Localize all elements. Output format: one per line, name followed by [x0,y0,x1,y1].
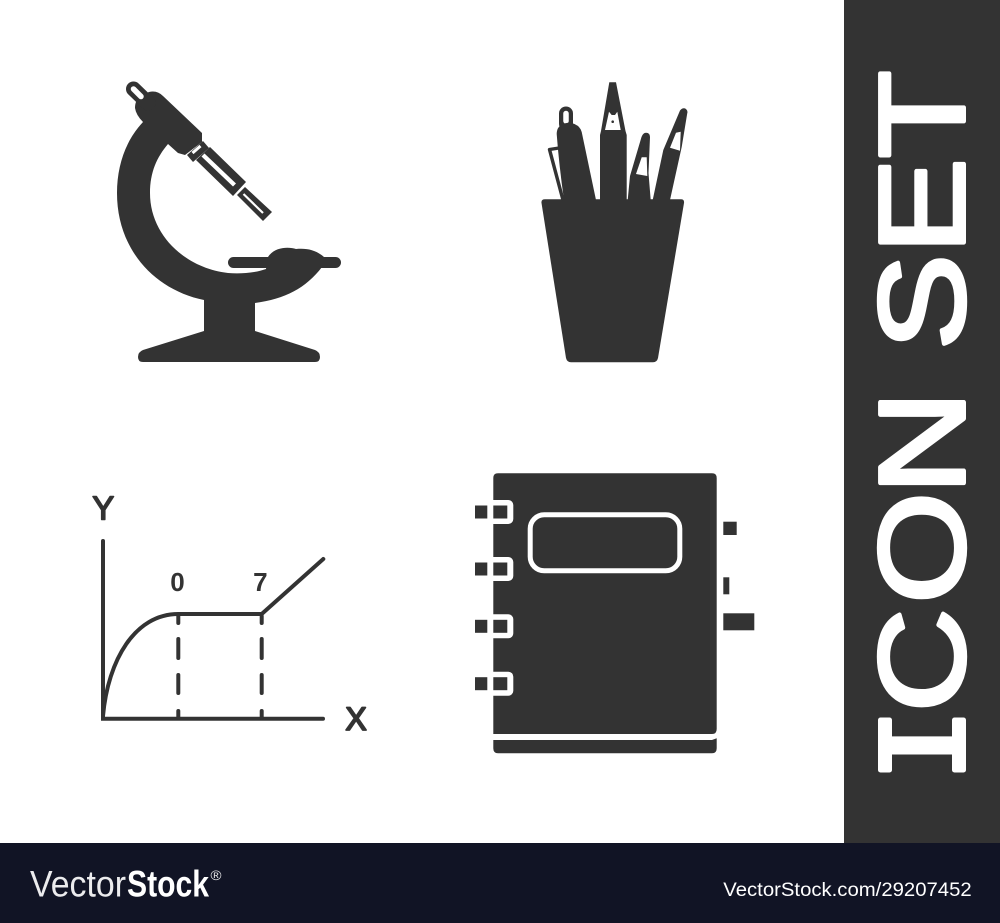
dashed guides [178,616,262,718]
cup [541,199,684,362]
icon: chart with X and Y axes [92,489,367,737]
tall pencil [600,82,627,200]
axis label X: X [345,701,367,737]
icon: spiral notebook [475,473,754,753]
side tabs [723,522,754,630]
axes [103,541,323,719]
binding rings [475,500,513,696]
curve [103,559,323,716]
icon: pencil cup [541,82,687,362]
value label 7: 7 [253,567,268,597]
notebook cover [493,473,717,734]
panel: side banner [844,0,1000,843]
icon: microscope [117,89,341,362]
slanted pencil [653,108,687,200]
notebook bottom pages [493,738,717,753]
logo VectorStock [30,864,222,905]
label window [530,515,680,571]
axis label Y: Y [92,489,114,526]
panel: footer bar [0,843,1000,923]
pen with clip [550,114,596,200]
banner text ICON SET: ICON SET [854,70,991,765]
logo VectorStock: Stock [127,864,209,905]
small pencil [628,133,651,200]
image id url: VectorStock.com/29207452 [723,879,972,901]
logo VectorStock: ® [210,867,222,883]
value label 0: 0 [170,567,185,597]
logo VectorStock: Vector [30,864,126,905]
